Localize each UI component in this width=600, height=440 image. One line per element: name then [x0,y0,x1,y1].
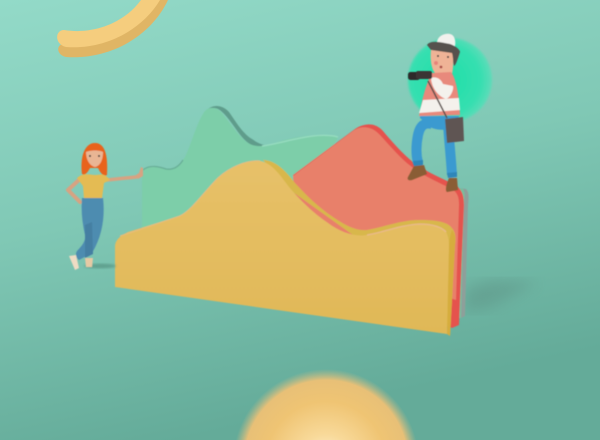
boots [408,165,427,180]
eyes [89,155,100,157]
shirt [419,72,460,116]
glowing ball [228,365,424,440]
yellow front area [115,160,456,336]
bag [445,117,464,143]
binoculars [408,71,432,80]
head [431,50,453,74]
ground shadow [84,264,116,268]
shirt [77,174,110,198]
strap [428,81,447,118]
arm on chart [107,177,136,180]
green glowing circle [408,38,492,122]
jeans [76,198,104,260]
area chart [115,106,469,336]
face [86,150,103,167]
man figure [408,34,464,192]
hand [136,167,143,179]
grey back side sliver [458,188,469,318]
hat [437,34,455,46]
arm on hip [68,179,80,202]
jeans crossed leg [85,222,93,258]
shoes [69,255,79,270]
trousers [413,116,459,178]
hair [82,143,107,175]
sleeve [431,77,453,99]
red area [293,124,464,328]
face details [434,55,449,68]
hair [427,42,460,66]
green back area [142,106,338,260]
woman figure [68,143,143,270]
decorative yellow arc [57,0,168,57]
shirt white band [419,98,460,113]
chart shadow [464,280,538,312]
